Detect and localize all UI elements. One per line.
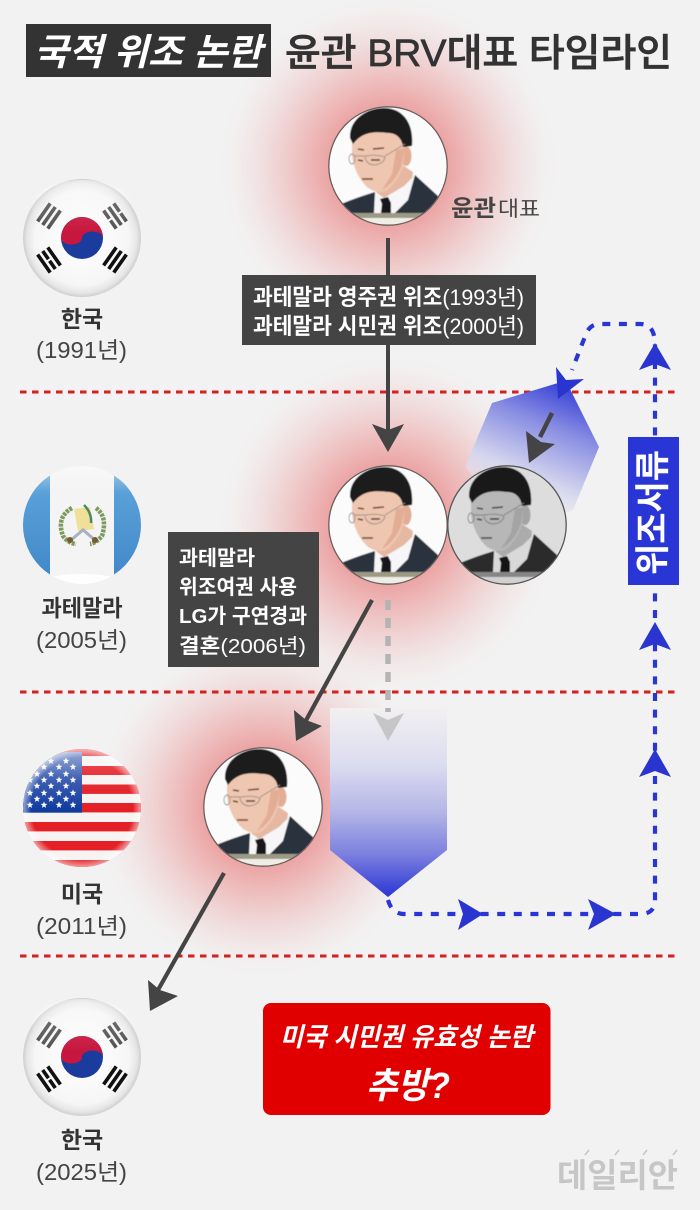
flag: Korea 2025 bbox=[23, 998, 141, 1116]
red glow behind top portrait bbox=[213, 0, 563, 341]
label: Guatemala 2005 bbox=[36, 595, 127, 653]
forged documents vertical label: 위조서류 bbox=[634, 450, 673, 575]
label: Korea 1991: (1991년) bbox=[36, 337, 127, 363]
forgery box 1993 and 2000 bbox=[242, 275, 536, 345]
name label: 대표 bbox=[498, 198, 540, 221]
route arrowhead up 1 bbox=[639, 749, 671, 777]
flag: USA bbox=[22, 748, 142, 869]
info box: forged passport and marriage: 위조여권 사용 bbox=[179, 576, 297, 599]
flag: Guatemala bbox=[23, 476, 141, 584]
label: USA 2011 bbox=[36, 881, 127, 939]
route arrowhead diagonal bbox=[556, 367, 584, 399]
portrait: Yoon Kwan US stage bbox=[201, 745, 325, 869]
title bbox=[26, 24, 672, 77]
forgery box 1993 and 2000: 과테말라 시민권 위조(2000년) bbox=[253, 314, 524, 339]
route arrowhead up 3 bbox=[639, 343, 671, 370]
portrait: Yoon Kwan Guatemala stage bbox=[326, 463, 450, 587]
label: USA 2011: 미국 bbox=[61, 881, 103, 907]
route arrowhead right 1 bbox=[458, 899, 483, 930]
arrow: US portrait to Korea 2025 bbox=[148, 873, 224, 1011]
portrait: greyed out bbox=[445, 463, 569, 587]
arrow: into greyed portrait bbox=[526, 413, 555, 463]
name label: 윤관 bbox=[451, 195, 496, 221]
portrait: Yoon Kwan top bbox=[326, 104, 450, 228]
route arrowhead up 2 bbox=[639, 622, 671, 650]
label: Korea 1991 bbox=[36, 306, 127, 363]
label: Korea 2025: (2025년) bbox=[36, 1159, 127, 1185]
gradient arrow shape pointing down bbox=[330, 708, 447, 897]
callout: deportation question bbox=[263, 1003, 550, 1115]
label: Korea 2025 bbox=[36, 1127, 127, 1185]
blue dashed route arrow bbox=[388, 324, 671, 930]
route arrowhead right 2 bbox=[588, 899, 616, 930]
gradient arrow shape toward greyed portrait bbox=[465, 383, 599, 530]
info box: forged passport and marriage: LG가 구연경과 bbox=[179, 605, 307, 628]
info box: forged passport and marriage: 과테말라 bbox=[179, 547, 255, 570]
callout: deportation question: 추방? bbox=[366, 1065, 450, 1106]
emblem bbox=[61, 505, 104, 544]
red glow behind middle portrait bbox=[213, 350, 563, 700]
forgery box 1993 and 2000: 과테말라 영주권 위조(1993년) bbox=[253, 285, 524, 310]
watermark logo: 데일리안 bbox=[557, 1157, 678, 1194]
forged documents vertical label bbox=[628, 437, 679, 585]
arrow: top portrait to Guatemala portrait bbox=[372, 238, 404, 452]
title main text: 윤관 BRV대표 타임라인 bbox=[285, 33, 672, 75]
label: Guatemala 2005: 과테말라 bbox=[42, 595, 122, 621]
label: Guatemala 2005: (2005년) bbox=[36, 627, 127, 653]
arrow: grey dashed downward bbox=[373, 600, 404, 741]
label: USA 2011: (2011년) bbox=[36, 913, 127, 939]
arrow: Guatemala portrait to US portrait bbox=[294, 600, 372, 741]
flag: Korea 1991 bbox=[23, 179, 141, 297]
title highlight: controversy: 국적 위조 논란 bbox=[34, 32, 267, 73]
label: Korea 1991: 한국 bbox=[61, 306, 103, 332]
red glow behind lower portrait bbox=[88, 632, 438, 982]
info box: forged passport and marriage: 결혼(2006년) bbox=[179, 635, 306, 658]
label: Korea 2025: 한국 bbox=[61, 1127, 103, 1153]
callout: deportation question: 미국 시민권 유효성 논란 bbox=[280, 1022, 536, 1052]
info box: forged passport and marriage bbox=[168, 532, 319, 667]
